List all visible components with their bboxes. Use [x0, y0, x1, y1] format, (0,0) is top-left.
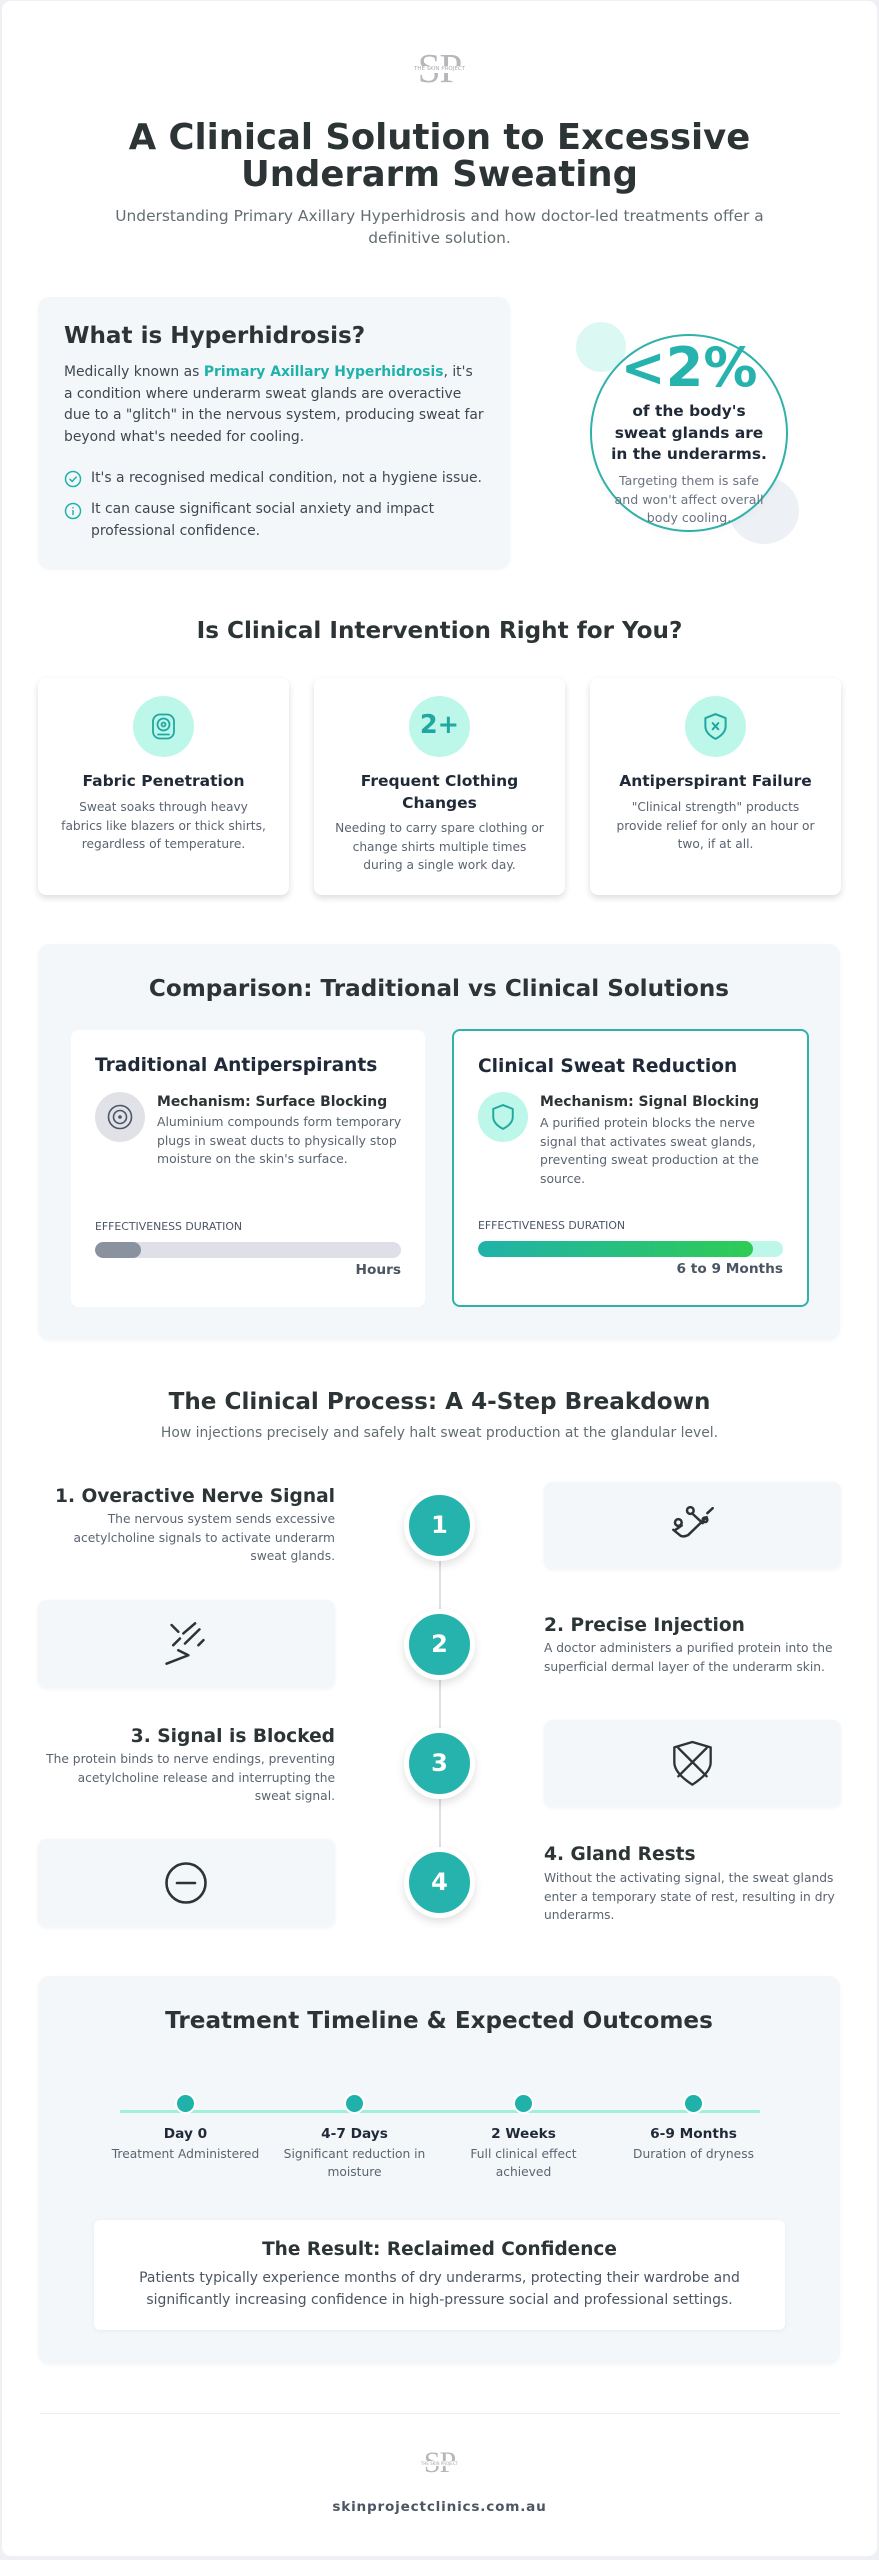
icon: two plus — [409, 696, 470, 757]
card text: change shirts multiple times — [353, 840, 526, 854]
milestone: 6-9 months — [633, 2093, 754, 2161]
value: months: 6 to 9 Months — [676, 1261, 783, 1277]
text: bullet 1: It's a recognised medical condition, not a hygiene issue. — [91, 470, 482, 486]
step 3 number — [404, 1728, 475, 1799]
step 4 text: Without the activating signal, the sweat glands — [544, 1871, 833, 1885]
card: frequent clothing changes — [314, 678, 565, 895]
card title: Changes — [402, 794, 477, 812]
card: fabric penetration — [38, 678, 289, 895]
step 2 number — [404, 1609, 475, 1680]
icon: check circle — [64, 470, 82, 488]
logo: footer: THE SKIN PROJECT — [421, 2461, 458, 2466]
card text: Needing to carry spare clothing or — [335, 821, 544, 835]
card: clinical sweat reduction — [452, 1029, 809, 1307]
stat caption — [611, 402, 767, 463]
mechanism title: Mechanism: Signal Blocking — [540, 1094, 759, 1110]
step 2 visual: signal — [38, 1600, 335, 1688]
stat note: body cooling. — [647, 510, 731, 525]
card title — [361, 772, 518, 812]
mechanism text: signal that activates sweat glands, — [540, 1134, 756, 1148]
step 3 text: sweat signal. — [255, 1789, 335, 1803]
step 1 visual: syringe — [544, 1482, 841, 1569]
mechanism text: preventing sweat production at the — [540, 1152, 759, 1167]
callout text — [139, 2270, 740, 2308]
step 4 text: enter a temporary state of rest, resulting in dry — [544, 1890, 835, 1904]
icon: fabric — [133, 696, 194, 757]
mechanism text — [540, 1115, 759, 1186]
panel: comparison — [38, 944, 840, 1340]
card text: Sweat soaks through heavy — [79, 800, 248, 814]
step 1 text: 1. Overactive Nerve Signal — [55, 1486, 335, 1507]
milestone: 2 weeks: achieved — [496, 2165, 551, 2179]
card text — [61, 800, 266, 851]
decorative blob: mint — [576, 322, 626, 372]
card text: "Clinical strength" products — [632, 800, 799, 814]
card text: provide relief for only an hour or — [617, 818, 814, 832]
step 2 number: 2 — [431, 1630, 448, 1658]
text: definition: a condition where underarm sweat glands are overactive — [64, 386, 461, 402]
icon: shield x — [685, 696, 746, 757]
step 1 number — [404, 1490, 475, 1561]
text: definition: beyond what's needed for cooling. — [64, 429, 304, 445]
step 4 visual: minus circle — [38, 1839, 335, 1927]
card text — [617, 800, 814, 851]
stat caption: of the body's — [632, 402, 746, 420]
timeline track — [120, 2110, 760, 2113]
mechanism text: Aluminium compounds form temporary — [157, 1114, 401, 1129]
heading: clinical process: The Clinical Process: A 4-Step Breakdown — [169, 1389, 710, 1415]
step 1 text: acetylcholine signals to activate underarm — [73, 1530, 335, 1544]
heading: treatment timeline: Treatment Timeline & Expected Outcomes — [165, 2008, 713, 2034]
milestone: 2 weeks: Full clinical effect — [470, 2147, 577, 2161]
text: bullet 2: professional confidence. — [91, 523, 260, 539]
label: effectiveness: EFFECTIVENESS DURATION — [478, 1219, 625, 1232]
step 4 text — [544, 1844, 835, 1922]
label: effectiveness: EFFECTIVENESS DURATION — [95, 1220, 242, 1233]
step 4 text: underarms. — [544, 1908, 614, 1922]
card title: Clinical Sweat Reduction — [478, 1056, 737, 1077]
heading: comparison: Comparison: Traditional vs Clinical Solutions — [149, 976, 729, 1002]
step 3 text: acetylcholine release and interrupting the — [78, 1770, 335, 1784]
milestone: 2 weeks — [470, 2093, 577, 2179]
stat: under 2 percent circle — [576, 322, 799, 544]
mechanism text: A purified protein blocks the nerve — [540, 1115, 755, 1130]
card text — [335, 821, 544, 872]
subtitle: Understanding Primary Axillary Hyperhidrosis and how doctor-led treatments offer a — [115, 207, 764, 225]
icon: surface blocking — [95, 1092, 145, 1142]
title — [129, 117, 750, 195]
card: antiperspirant failure — [590, 678, 841, 895]
mechanism text — [157, 1114, 401, 1166]
step 3 visual: shield — [544, 1720, 841, 1807]
step 3 text — [46, 1726, 335, 1803]
text: definition — [64, 364, 484, 445]
milestone: 6-9 months: 6-9 Months — [650, 2126, 737, 2142]
stat value: <2% — [621, 336, 757, 399]
text: bullet 2: It can cause significant social anxiety and impact — [91, 501, 434, 517]
heading: what is hyperhidrosis: What is Hyperhidrosis? — [64, 323, 365, 349]
stat note: and won't affect overall — [615, 492, 763, 507]
heading: is clinical intervention right for you: Is Clinical Intervention Right for You? — [197, 618, 682, 644]
callout text: significantly increasing confidence in high-pressure social and professional settings. — [146, 2292, 733, 2308]
milestone: 4-7 days: moisture — [327, 2165, 382, 2179]
milestone: 4-7 days: Significant reduction in — [284, 2147, 425, 2161]
subtitle: definitive solution. — [368, 229, 511, 247]
step 2 text: superficial dermal layer of the underarm skin. — [544, 1660, 825, 1674]
callout: the result — [94, 2220, 785, 2330]
panel: what is hyperhidrosis — [38, 297, 510, 569]
milestone: day 0 — [112, 2093, 259, 2161]
milestone: day 0: Day 0 — [164, 2126, 207, 2142]
milestone: 6-9 months: Duration of dryness — [633, 2147, 754, 2161]
card title: Traditional Antiperspirants — [95, 1055, 377, 1076]
connector line — [439, 1526, 440, 1883]
stat note — [615, 473, 763, 525]
card title: Frequent Clothing — [361, 772, 518, 790]
mechanism text: plugs in sweat ducts to physically stop — [157, 1132, 397, 1148]
milestone: day 0: Treatment Administered — [112, 2147, 259, 2161]
text: bullet 2 — [91, 501, 434, 539]
title: Underarm Sweating — [241, 154, 638, 195]
step 4 number: 4 — [431, 1868, 448, 1896]
title: A Clinical Solution to Excessive — [129, 117, 750, 158]
step 2 text: A doctor administers a purified protein into the — [544, 1641, 833, 1655]
panel: treatment timeline — [38, 1976, 840, 2364]
mechanism text: source. — [540, 1170, 585, 1186]
card text: two, if at all. — [678, 837, 753, 851]
step 4 text: 4. Gland Rests — [544, 1844, 696, 1865]
card text: regardless of temperature. — [82, 837, 245, 851]
step 2 text: 2. Precise Injection — [544, 1615, 745, 1636]
callout title: The Result: Reclaimed Confidence — [262, 2239, 617, 2260]
bar: months — [478, 1241, 783, 1257]
logo: header: THE SKIN PROJECT — [414, 66, 465, 72]
step 1 text: sweat glands. — [250, 1549, 335, 1563]
milestone: 4-7 days: 4-7 Days — [321, 2126, 388, 2142]
text: definition: Medically known as Primary Axillary Hyperhidrosis, it's — [64, 364, 473, 380]
stat caption: in the underarms. — [611, 445, 767, 463]
step 1 number: 1 — [431, 1511, 448, 1539]
icon: shield — [478, 1092, 528, 1142]
step 2 text — [544, 1615, 833, 1674]
stat note: Targeting them is safe — [619, 473, 759, 488]
icon: info circle — [64, 502, 82, 520]
subtitle — [115, 207, 764, 247]
stat circle — [590, 334, 788, 532]
value: hours: Hours — [355, 1262, 401, 1278]
card text: fabrics like blazers or thick shirts, — [61, 818, 266, 832]
footer divider — [40, 2413, 840, 2414]
card: traditional antiperspirants — [71, 1030, 425, 1307]
footer url: skinprojectclinics.com.au — [332, 2499, 547, 2515]
milestone: 4-7 days — [284, 2093, 425, 2179]
step 3 text: 3. Signal is Blocked — [131, 1726, 335, 1747]
icon: two plus: 2+ — [420, 710, 459, 740]
text: definition: due to a "glitch" in the nervous system, producing sweat far — [64, 407, 484, 423]
bar: hours — [95, 1242, 401, 1258]
decorative blob: grey — [729, 477, 799, 544]
step 3 text: The protein binds to nerve endings, preventing — [46, 1752, 335, 1766]
step 3 number: 3 — [431, 1749, 448, 1777]
step 1 text — [55, 1486, 335, 1563]
mechanism text: moisture on the skin's surface. — [157, 1151, 348, 1166]
stat caption: sweat glands are — [615, 424, 763, 442]
mechanism title: Mechanism: Surface Blocking — [157, 1094, 387, 1110]
step 1 text: The nervous system sends excessive — [108, 1512, 335, 1526]
card title: Antiperspirant Failure — [619, 772, 812, 790]
card title: Fabric Penetration — [82, 772, 245, 790]
step 4 number — [404, 1847, 475, 1918]
subheading: clinical process: How injections precisely and safely halt sweat production at the glandular level. — [161, 1425, 718, 1441]
milestone: 2 weeks: 2 Weeks — [491, 2126, 556, 2142]
callout text: Patients typically experience months of dry underarms, protecting their wardrobe and — [139, 2270, 740, 2286]
card text: during a single work day. — [363, 858, 516, 872]
